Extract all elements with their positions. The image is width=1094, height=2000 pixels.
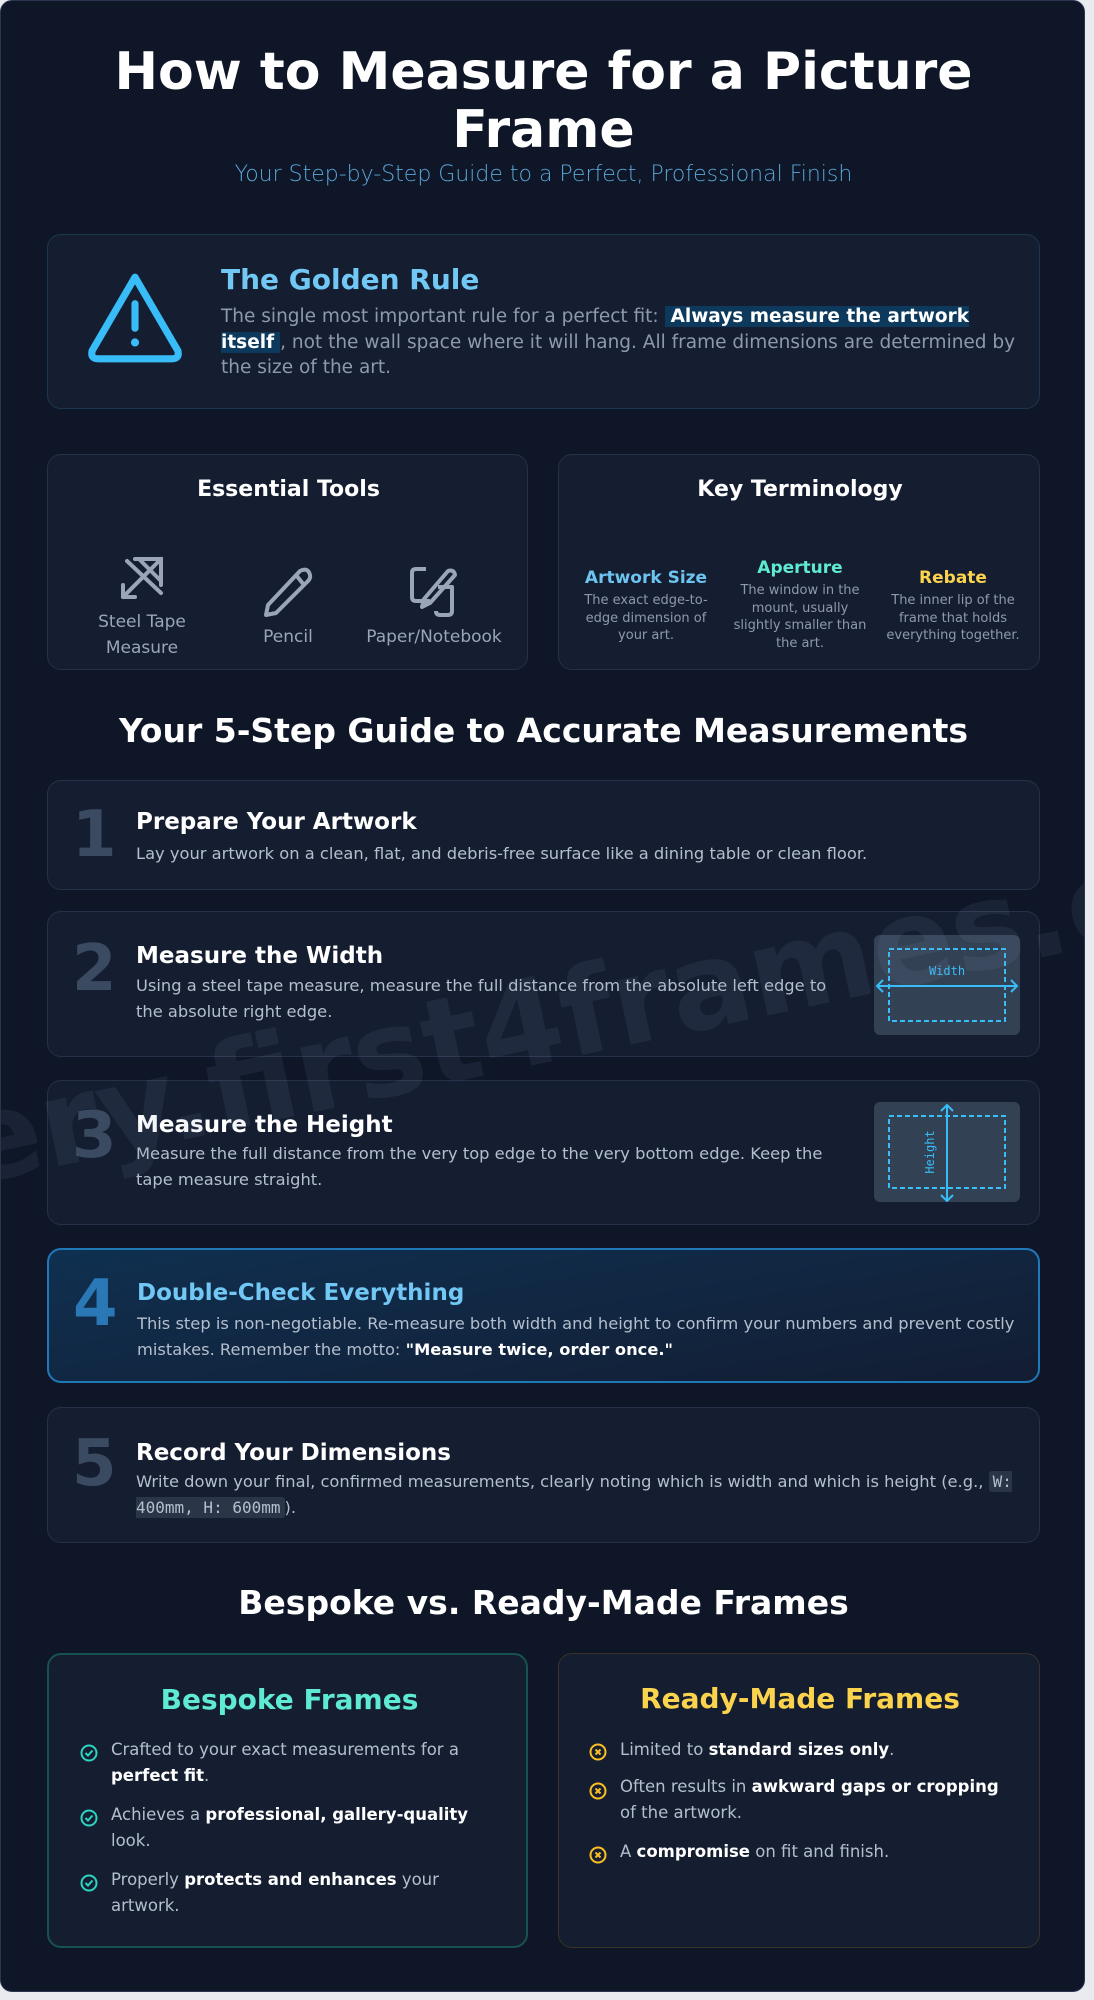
title	[114, 42, 972, 160]
tool: steel tape: Measure	[106, 638, 178, 658]
step 5: Write down your final, confirmed measurements, clearly noting which is width and which is height (e.g., W: 400mm, H: 600mm).	[136, 1472, 1012, 1517]
step 3: 3	[72, 1099, 117, 1173]
heading: 5-step guide: Your 5-Step Guide to Accurate Measurements	[119, 711, 968, 750]
heading: bespoke: Bespoke Frames	[161, 1683, 418, 1716]
panel: key terminology	[558, 454, 1040, 670]
illustration: width	[874, 935, 1020, 1035]
illustration: width: Width	[929, 964, 965, 978]
term: rebate: The inner lip of the frame that holds everything together.	[886, 593, 1020, 643]
step 1: 1	[72, 798, 117, 872]
tool: pencil	[263, 568, 313, 647]
subtitle: Your Step-by-Step Guide to a Perfect, Professional Finish	[235, 162, 852, 187]
step 2: 2	[72, 932, 117, 1006]
list: bespoke benefits: Crafted to your exact measurements for a perfect fit.	[111, 1740, 459, 1785]
list: bespoke benefits	[80, 1740, 468, 1915]
step 4 (highlighted): This step is non-negotiable. Re-measure both width and height to confirm your numbers and prevent costly mistakes. Remember the motto: "Measure twice, order once."	[137, 1314, 1014, 1359]
illustration: height	[874, 1102, 1020, 1202]
panel: bespoke frames	[47, 1653, 528, 1948]
text: golden rule body: The single most important rule for a perfect fit: Always measure the artwork itself , not the wall space where it will hang. All frame dimensions are determined by the size of the art.	[221, 306, 1015, 378]
step 3: Measure the full distance from the very top edge to the very bottom edge. Keep the tape measure straight.	[136, 1144, 822, 1189]
term: artwork size	[584, 568, 708, 643]
panel: essential tools	[47, 454, 528, 670]
heading: golden rule: The Golden Rule	[221, 263, 479, 296]
step 4 (highlighted)	[47, 1248, 1040, 1383]
title: Frame	[452, 100, 635, 160]
term: aperture: Aperture	[757, 558, 843, 578]
step 1: Lay your artwork on a clean, flat, and debris-free surface like a dining table or clean floor.	[136, 844, 867, 863]
list: bespoke benefits: Achieves a professional, gallery-quality look.	[111, 1805, 468, 1850]
heading: ready-made: Ready-Made Frames	[640, 1682, 960, 1715]
list: ready-made drawbacks: Limited to standard sizes only.	[620, 1740, 894, 1759]
tool: pencil: Pencil	[263, 627, 313, 647]
icon: warning triangle	[88, 274, 182, 362]
term: rebate	[886, 568, 1020, 643]
step 5	[47, 1407, 1040, 1543]
heading: key terminology: Key Terminology	[697, 477, 903, 502]
step 2: Measure the Width	[136, 943, 383, 969]
tool: paper/notebook: Paper/Notebook	[366, 627, 502, 647]
term: rebate: Rebate	[919, 568, 987, 588]
tool: steel tape	[98, 556, 186, 658]
step 4 (highlighted): Double-Check Everything	[137, 1280, 464, 1306]
step 3: Measure the Height	[136, 1112, 393, 1138]
step 2	[47, 911, 1040, 1057]
heading: bespoke vs ready-made: Bespoke vs. Ready-Made Frames	[238, 1583, 849, 1622]
step 2: Using a steel tape measure, measure the full distance from the absolute left edge to the absolute right edge.	[136, 976, 826, 1021]
step 4 (highlighted): 4	[73, 1267, 118, 1341]
list: ready-made drawbacks: Often results in awkward gaps or cropping of the artwork.	[620, 1777, 999, 1822]
heading: essential tools: Essential Tools	[197, 477, 380, 502]
illustration: height: Height	[923, 1130, 937, 1174]
step 5: 5	[72, 1427, 117, 1501]
panel: ready-made frames	[558, 1653, 1040, 1948]
step 1: Prepare Your Artwork	[136, 809, 417, 835]
step 5: Record Your Dimensions	[136, 1440, 451, 1466]
step 1	[47, 780, 1040, 890]
panel: golden rule	[47, 234, 1040, 409]
tool: steel tape: Steel Tape	[98, 612, 186, 632]
list: ready-made drawbacks: A compromise on fit and finish.	[620, 1842, 889, 1861]
title: How to Measure for a Picture	[114, 42, 972, 102]
list: ready-made drawbacks	[590, 1740, 999, 1864]
step 3	[47, 1080, 1040, 1225]
term: artwork size: Artwork Size	[585, 568, 707, 588]
term: aperture: The window in the mount, usually slightly smaller than the art.	[734, 583, 866, 650]
term: artwork size: The exact edge-to-edge dimension of your art.	[584, 593, 708, 643]
tool: paper/notebook	[366, 567, 502, 647]
list: bespoke benefits: Properly protects and enhances your artwork.	[111, 1870, 439, 1915]
